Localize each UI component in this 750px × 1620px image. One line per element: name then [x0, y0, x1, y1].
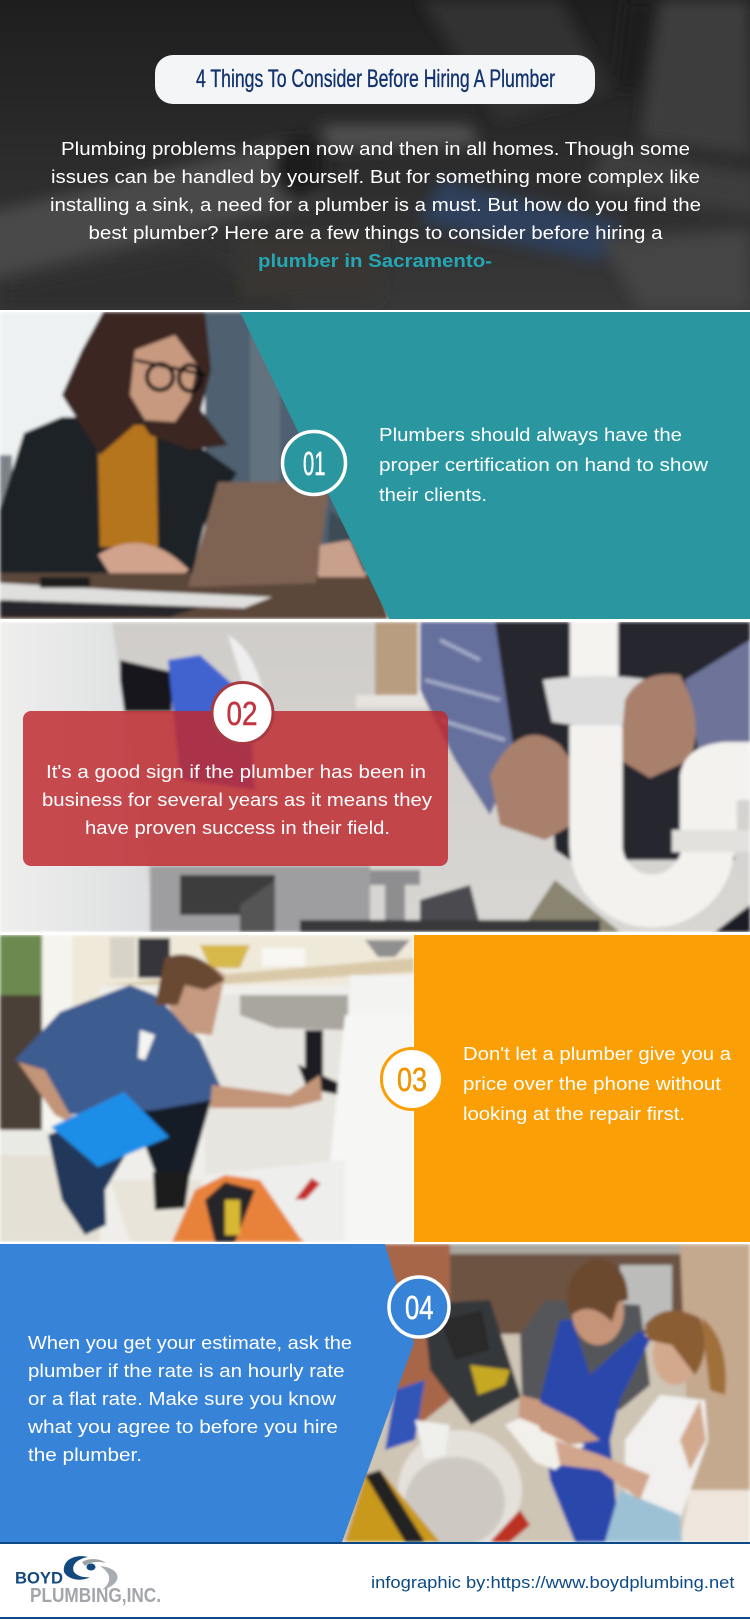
text 01: proper certification on hand to show — [379, 455, 709, 475]
text 03: looking at the repair first. — [463, 1104, 685, 1124]
panel 01: certification — [0, 312, 750, 619]
text 03: Don't let a plumber give you a — [463, 1044, 732, 1064]
teal panel — [240, 312, 750, 619]
panel 03: price — [0, 935, 750, 1242]
footer — [0, 1542, 750, 1619]
text 01 — [379, 425, 709, 505]
blue panel — [0, 1244, 414, 1542]
text 02: business for several years as it means they — [42, 790, 432, 810]
logo: PLUMBING,INC. — [30, 1585, 161, 1607]
text 02: have proven success in their field. — [85, 818, 390, 838]
number badge 01: 01 — [303, 445, 326, 482]
photo: hands fitting a white pipe — [0, 622, 750, 932]
footer background — [0, 1542, 750, 1618]
text 03 — [463, 1044, 732, 1124]
number badge 04: 04 — [405, 1289, 434, 1326]
number badge 01 — [282, 432, 346, 494]
photo: woman with laptop — [0, 312, 400, 619]
header section — [0, 0, 750, 310]
number badge 02: 02 — [226, 695, 258, 732]
text 01: their clients. — [379, 485, 487, 505]
title pill — [155, 55, 595, 104]
orange panel — [414, 935, 750, 1242]
number badge 03 — [382, 1048, 442, 1110]
text 04: or a flat rate. Make sure you know — [28, 1389, 337, 1409]
text 04: When you get your estimate, ask the — [28, 1333, 352, 1353]
credit text: infographic by:https://www.boydplumbing.net — [371, 1573, 735, 1592]
text 02: It's a good sign if the plumber has been in — [46, 762, 426, 782]
text 04: plumber if the rate is an hourly rate — [28, 1361, 344, 1381]
intro text: installing a sink, a need for a plumber is a must. But how do you find the — [50, 195, 701, 215]
title pill: 4 Things To Consider Before Hiring A Plumber — [196, 65, 555, 93]
intro text: issues can be handled by yourself. But for something more complex like — [51, 167, 700, 187]
number badge 03: 03 — [397, 1061, 427, 1098]
number badge 02 — [212, 682, 273, 744]
number badge 04 — [389, 1277, 449, 1337]
red translucent card — [23, 711, 448, 866]
text 03: price over the phone without — [463, 1074, 721, 1094]
intro text — [50, 139, 701, 271]
text 02 — [42, 762, 432, 838]
text 04 — [27, 1333, 352, 1465]
photo: plumber and customer above a sink — [330, 1244, 750, 1550]
panel 02: experience — [0, 622, 750, 932]
logo: BOYD — [15, 1568, 63, 1588]
text 04: what you agree to before you hire — [27, 1417, 338, 1437]
text 01: Plumbers should always have the — [379, 425, 682, 445]
intro text: best plumber? Here are a few things to consider before hiring a — [88, 223, 664, 243]
logo — [15, 1556, 161, 1607]
text 04: the plumber. — [28, 1445, 142, 1465]
intro text: Plumbing problems happen now and then in all homes. Though some — [61, 139, 690, 159]
panel 04: rates — [0, 1244, 750, 1550]
photo: plumber inspecting under a sink — [0, 935, 414, 1242]
intro text: plumber in Sacramento- — [258, 251, 492, 271]
header photo background — [0, 0, 750, 310]
